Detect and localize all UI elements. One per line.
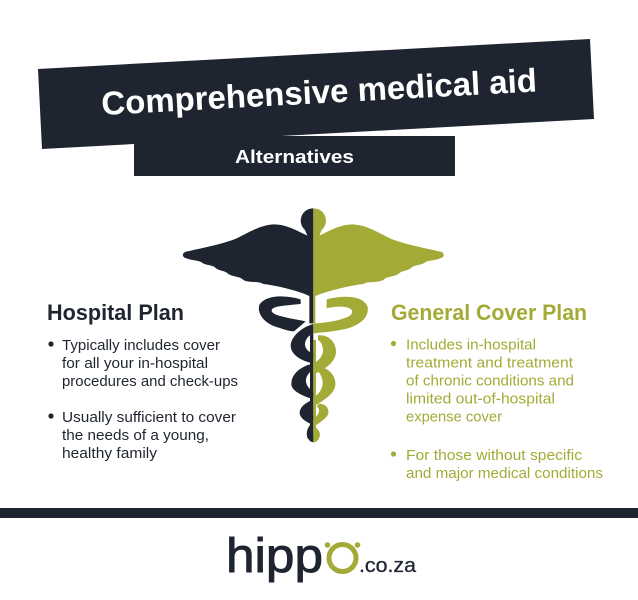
logo wordmark: hipp xyxy=(226,530,323,583)
panel: general cover plan xyxy=(391,300,603,482)
bullet list: hospital plan: procedures and check-ups xyxy=(62,374,238,390)
banner background xyxy=(38,39,594,149)
title banner xyxy=(38,39,594,176)
caduceus right half xyxy=(313,208,444,443)
bullet list: general cover plan: expense cover xyxy=(406,410,502,426)
bullet list: hospital plan: healthy family xyxy=(62,446,158,462)
bullet list: hospital plan xyxy=(48,338,238,462)
title text: Comprehensive medical aid xyxy=(100,61,538,122)
bullet list: general cover plan: limited out-of-hospital xyxy=(406,392,555,408)
logo: hippo.co.za xyxy=(226,530,417,583)
bullet list: general cover plan: of chronic conditions and xyxy=(406,374,574,390)
caduceus left half xyxy=(183,208,313,442)
heading: general cover plan: General Cover Plan xyxy=(391,300,587,325)
subtitle text: Alternatives xyxy=(235,147,354,167)
bullet list: hospital plan: Usually sufficient to cover xyxy=(62,410,236,426)
bullet list: general cover plan: treatment and treatment xyxy=(406,356,573,372)
bullet list: general cover plan xyxy=(391,338,603,482)
bullet list: general cover plan: For those without specific xyxy=(406,448,582,464)
heading: hospital plan: Hospital Plan xyxy=(47,300,184,325)
icon: caduceus xyxy=(183,208,444,443)
bullet list: hospital plan: Typically includes cover xyxy=(62,338,220,354)
bullet list: general cover plan: and major medical conditions xyxy=(406,466,603,482)
bullet list: hospital plan: for all your in-hospital xyxy=(62,356,208,372)
footer bar xyxy=(0,508,638,518)
bullet list: general cover plan: Includes in-hospital xyxy=(406,338,536,354)
subtitle bar xyxy=(134,136,455,176)
bullet list: hospital plan: the needs of a young, xyxy=(62,428,209,444)
logo domain: .co.za xyxy=(359,555,417,577)
logo o with ears xyxy=(325,542,360,572)
panel: hospital plan xyxy=(47,300,238,462)
